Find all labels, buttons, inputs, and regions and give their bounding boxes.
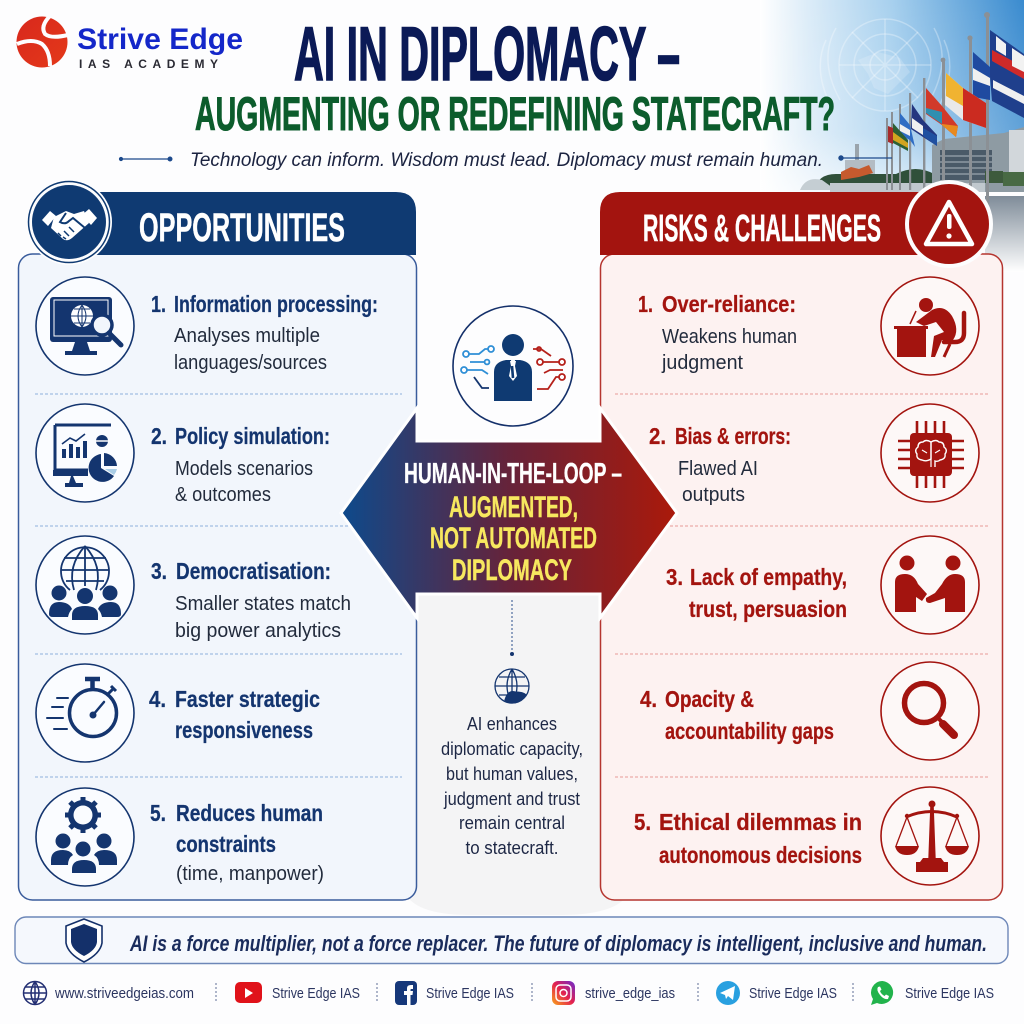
text: lack of empathy: 3. (666, 564, 683, 590)
icon: shield (66, 919, 102, 962)
text: information processing: 1. (151, 291, 166, 317)
icon: globe and people (36, 536, 134, 634)
icon: person at desk (881, 277, 979, 375)
central summary text: to statecraft. (466, 838, 558, 858)
flag poles (886, 12, 990, 205)
central summary text: but human values, (446, 764, 578, 784)
icon: gear and people (36, 788, 134, 886)
text: opacity and accountability (640, 686, 834, 744)
tagline: Technology can inform. Wisdom must lead. Diplomacy must remain human. (190, 149, 823, 171)
item 5 ethical dilemmas (634, 787, 979, 885)
icon: chart monitor (36, 404, 134, 502)
bottom banner (15, 917, 1008, 964)
text: information processing: Information processing: (174, 291, 378, 317)
icon: human with circuits (418, 257, 600, 439)
instagram: strive_edge_ias (585, 985, 675, 1002)
text: reduces constraints (150, 800, 324, 885)
text: policy simulation: Policy simulation: (175, 423, 330, 449)
icon: warning (905, 180, 993, 268)
item 4 faster responsiveness (36, 664, 320, 762)
central summary text: judgment and trust (443, 789, 580, 809)
text: reduces constraints: constraints (176, 831, 276, 857)
text: faster responsiveness: Faster strategic (175, 686, 320, 712)
whatsapp: Strive Edge IAS (905, 985, 994, 1002)
central arrow: human-in-the-loop: NOT AUTOMATED (430, 522, 597, 555)
text: ethical dilemmas: autonomous decisions (659, 842, 862, 868)
facebook: Strive Edge IAS (426, 985, 514, 1002)
text: opacity and accountability: 4. (640, 686, 657, 712)
icon: monitor search (36, 277, 134, 375)
website: www.striveedgeias.com (54, 985, 194, 1002)
facebook (395, 981, 514, 1005)
text: democratisation: Democratisation: (176, 558, 331, 584)
website (24, 982, 194, 1004)
icon: two people shaking hands (881, 536, 979, 634)
text: ethical dilemmas (634, 809, 862, 868)
text: faster responsiveness (149, 686, 320, 743)
central column background (402, 594, 632, 915)
text: lack of empathy: Lack of empathy, (690, 564, 847, 590)
item 4 opacity (640, 662, 979, 760)
item 3 democratisation (36, 536, 351, 642)
central arrow: human-in-the-loop: AUGMENTED, (449, 491, 578, 524)
youtube: Strive Edge IAS (272, 985, 360, 1002)
tagline marker left (119, 157, 172, 161)
icon: scales of justice (881, 787, 979, 885)
text: policy simulation: & outcomes (175, 484, 271, 506)
icon: AI chip (881, 404, 979, 502)
telegram: Strive Edge IAS (749, 985, 837, 1002)
text: bias and errors (649, 423, 791, 506)
text: reduces constraints: Reduces human (176, 800, 323, 826)
text: bias and errors: Bias & errors: (675, 423, 791, 449)
text: over-reliance: 1. (638, 291, 653, 317)
text: democratisation: Smaller states match (175, 593, 351, 615)
text: policy simulation: Models scenarios (175, 458, 313, 480)
title: AI IN DIPLOMACY – (294, 12, 680, 97)
heading: opportunities: OPPORTUNITIES (139, 206, 345, 250)
photo: UN flags and building (760, 0, 1024, 272)
logo name: Strive Edge (77, 23, 243, 56)
text: democratisation (151, 558, 351, 642)
item 2 bias and errors (649, 404, 979, 506)
text: lack of empathy (666, 564, 847, 622)
icon: stopwatch (36, 664, 134, 762)
central arrow: human-in-the-loop: HUMAN-IN-THE-LOOP – (404, 458, 622, 490)
item 3 lack of empathy (666, 536, 979, 634)
central summary text (441, 714, 583, 858)
icon: magnifier (881, 662, 979, 760)
text: policy simulation (151, 423, 330, 506)
text: faster responsiveness: responsiveness (175, 717, 313, 743)
instagram (552, 981, 675, 1005)
logo mark (16, 16, 68, 68)
youtube (235, 982, 360, 1003)
telegram (716, 981, 837, 1005)
central summary text: remain central (459, 813, 565, 833)
item 5 reduces constraints (36, 788, 324, 886)
text: over-reliance: judgment (661, 352, 743, 374)
central summary text: AI enhances (467, 714, 557, 734)
text: faster responsiveness: 4. (149, 686, 166, 712)
text: bias and errors: 2. (649, 423, 666, 449)
text: lack of empathy: trust, persuasion (689, 596, 847, 622)
text: policy simulation: 2. (151, 423, 167, 449)
panel: risks and challenges (600, 180, 1002, 900)
logo (16, 16, 243, 71)
text: over-reliance (638, 291, 797, 374)
connector line (510, 600, 514, 656)
text: opacity and accountability: accountability gaps (665, 718, 834, 744)
text: ethical dilemmas: 5. (634, 809, 651, 835)
text: ethical dilemmas: Ethical dilemmas in (659, 809, 862, 835)
item 1 over-reliance (638, 277, 979, 375)
text: over-reliance: Weakens human (662, 326, 797, 348)
text: reduces constraints: 5. (150, 800, 166, 826)
logo tagline: IAS ACADEMY (79, 57, 218, 71)
text: information processing: Analyses multiple (174, 325, 320, 347)
central arrow: human-in-the-loop (341, 408, 677, 618)
icon: handshake (26, 179, 112, 265)
tagline marker right (839, 156, 892, 160)
central arrow: human-in-the-loop: DIPLOMACY (452, 554, 572, 587)
text: reduces constraints: (time, manpower) (176, 863, 324, 885)
item 2 policy simulation (36, 404, 330, 506)
footer links (24, 981, 994, 1005)
item 1 information processing (36, 277, 378, 375)
text: over-reliance: Over-reliance: (662, 291, 796, 317)
text: democratisation: big power analytics (175, 620, 341, 642)
text: democratisation: 3. (151, 558, 167, 584)
text: bias and errors: Flawed AI (678, 458, 758, 480)
text: opacity and accountability: Opacity & (665, 686, 754, 712)
text: information processing: languages/sources (174, 352, 327, 374)
flags (990, 30, 1024, 118)
text: information processing (151, 291, 378, 374)
icon: small globe (495, 669, 529, 703)
panel: opportunities (18, 179, 416, 900)
text: bias and errors: outputs (682, 484, 745, 506)
central summary text: diplomatic capacity, (441, 739, 583, 759)
whatsapp (871, 981, 994, 1005)
